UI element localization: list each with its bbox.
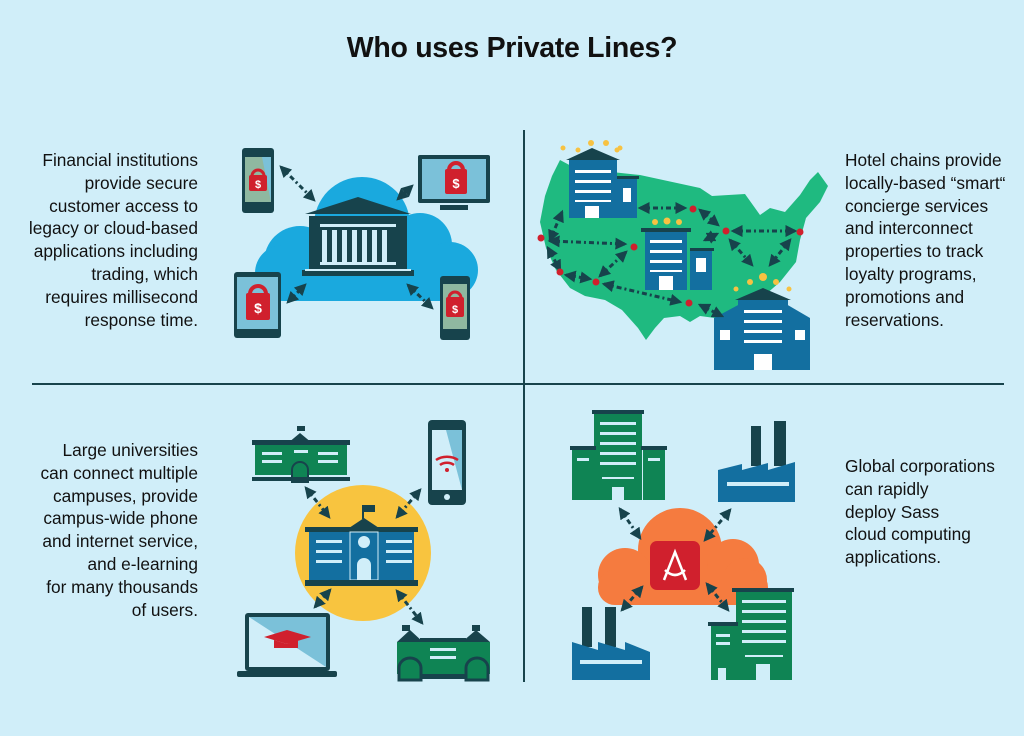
text: corporations: deploy Sass [845, 502, 939, 522]
text: financial: trading, which [91, 264, 198, 284]
icon: monitor [418, 155, 490, 210]
title: Who uses Private Lines? [347, 32, 677, 64]
cloud blue [255, 177, 478, 301]
arrows [281, 167, 432, 308]
text: corporations: Global corporations [845, 456, 995, 476]
icon: central school [305, 505, 418, 586]
text: hotel: loyalty programs, [845, 264, 977, 284]
text: corporations: can rapidly [845, 479, 929, 499]
text: financial: provide secure [85, 173, 198, 193]
text: universities: campus-wide phone [43, 508, 198, 528]
text: universities: for many thousands [46, 577, 198, 597]
text: corporations [845, 456, 995, 567]
icon: monitor: $ [452, 176, 460, 191]
hotel 1 [560, 140, 639, 218]
icon: phone bottom-right: $ [452, 304, 458, 316]
text: hotel [845, 150, 1005, 330]
icon: tablet: $ [254, 300, 262, 316]
icon: tall building [570, 410, 667, 500]
text: financial [29, 150, 198, 330]
text: universities: campuses, provide [53, 486, 198, 506]
icon: bank [302, 197, 414, 276]
text: universities: can connect multiple [40, 463, 198, 483]
text: hotel: Hotel chains provide [845, 150, 1002, 170]
icon: top school [252, 426, 350, 482]
icon: phone top-left [242, 148, 274, 213]
arrows [620, 509, 730, 610]
icon: tablet [234, 272, 281, 338]
text: financial: Financial institutions [42, 150, 198, 170]
hotel 3 [714, 273, 810, 370]
text: universities [40, 440, 198, 620]
text: universities: of users. [132, 600, 198, 620]
hotel 2 [641, 218, 714, 290]
text: universities: and e-learning [88, 554, 198, 574]
icon: phone bottom-right [440, 276, 470, 340]
icon: bottom school [397, 625, 490, 680]
panel: university graphic [237, 420, 490, 680]
text: corporations: applications. [845, 547, 941, 567]
icon: factory bottom-left [572, 607, 650, 680]
text: financial: requires millisecond [45, 287, 198, 307]
text: universities: Large universities [63, 440, 198, 460]
text: universities: and internet service, [42, 531, 198, 551]
text: hotel: and interconnect [845, 218, 973, 238]
text: financial: response time. [85, 310, 198, 330]
text: hotel: reservations. [845, 310, 944, 330]
icon: phone top-left: $ [255, 179, 261, 191]
text: hotel: locally-based “smart“ [845, 173, 1005, 193]
panel: corporations graphic [570, 410, 795, 680]
icon: app [650, 541, 700, 590]
text: hotel: concierge services [845, 196, 988, 216]
arrows [306, 488, 422, 623]
icon: factory top-right [718, 421, 795, 502]
cloud orange [598, 508, 768, 605]
text: hotel: promotions and [845, 287, 964, 307]
circle yellow [295, 485, 431, 621]
text: hotel: properties to track [845, 241, 983, 261]
map USA [540, 160, 828, 344]
panel: hotel graphic [538, 140, 828, 370]
text: corporations: cloud computing [845, 524, 971, 544]
text: financial: customer access to [49, 196, 198, 216]
text: financial: legacy or cloud-based [29, 218, 198, 238]
icon: laptop [237, 613, 337, 677]
network arrows [548, 208, 795, 316]
icon: building bottom-right [708, 588, 794, 680]
text: financial: applications including [34, 241, 198, 261]
icon: wifi phone [428, 420, 466, 505]
panel: financial graphic [234, 148, 490, 340]
